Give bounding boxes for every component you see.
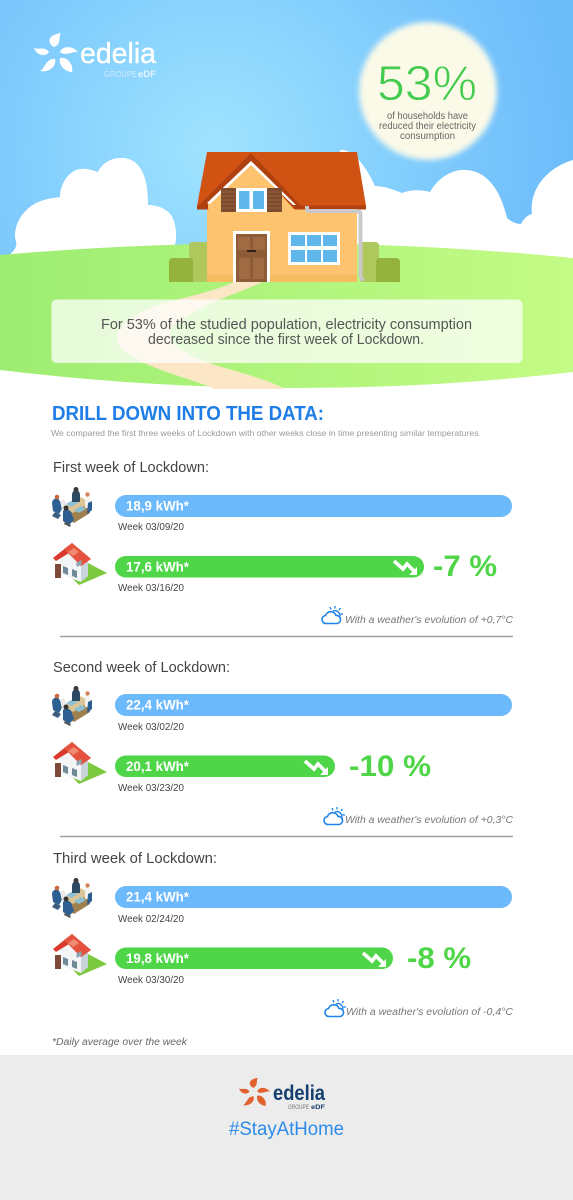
footnote: *Daily average over the week — [52, 1037, 188, 1048]
section: second week: Week 03/23/20 — [118, 783, 184, 794]
percent: -8 % — [407, 942, 471, 975]
weather note — [325, 999, 514, 1018]
weather note: With a weather's evolution of +0,7°C — [345, 615, 514, 626]
callout panel — [52, 300, 522, 363]
subheading: We compared the first three weeks of Lockdown with other weeks close in time presenting similar temperatures. — [51, 428, 481, 438]
wall — [207, 200, 357, 282]
bar: green lockdown week: 20,1 kWh* — [126, 758, 190, 774]
house — [169, 152, 400, 282]
footer — [0, 1055, 573, 1200]
callout panel: decreased since the first week of Lockdown. — [148, 331, 424, 348]
clouds — [8, 150, 573, 270]
logo: edelia colour: edelia — [273, 1082, 325, 1105]
bar: blue reference week: 22,4 kWh* — [126, 696, 190, 712]
sun with statistic — [359, 22, 497, 160]
section: first week: First week of Lockdown: — [53, 459, 209, 476]
callout panel: For 53% of the studied population, electricity consumption — [101, 316, 472, 333]
percent: -7 % — [433, 550, 497, 583]
section: first week: Week 03/09/20 — [118, 522, 184, 533]
icon: home — [53, 543, 107, 585]
percent: -10 % — [349, 750, 431, 783]
bar: blue reference week — [115, 886, 512, 908]
weather note: With a weather's evolution of +0,3°C — [345, 815, 514, 826]
logo: edelia white: edelia — [80, 38, 157, 70]
bar: blue reference week: 18,9 kWh* — [126, 498, 190, 514]
weather note: With a weather's evolution of -0,4°C — [346, 1007, 514, 1018]
window — [288, 232, 340, 265]
garden path — [117, 282, 285, 389]
bar: blue reference week: 21,4 kWh* — [126, 888, 190, 904]
sun with statistic: reduced their electricity — [379, 121, 476, 132]
weather note — [324, 807, 514, 826]
gable — [207, 162, 296, 212]
sun with statistic: 53% — [377, 57, 477, 111]
section: third week: Week 03/30/20 — [118, 975, 184, 986]
weather note — [322, 606, 514, 626]
green hill — [0, 243, 573, 388]
section: first week: Week 03/16/20 — [118, 583, 184, 594]
logo: edelia colour — [239, 1078, 325, 1111]
bar: blue reference week — [115, 495, 512, 517]
hashtag: #StayAtHome — [229, 1119, 344, 1140]
icon: office — [52, 878, 92, 918]
icon: office — [52, 686, 92, 726]
logo: edelia white: eDF — [138, 69, 157, 79]
heading: DRILL DOWN INTO THE DATA: — [52, 402, 324, 425]
sun with statistic: of households have — [387, 111, 468, 122]
section: second week — [52, 659, 514, 826]
door — [233, 231, 270, 282]
roof — [197, 152, 366, 206]
logo: edelia white — [34, 33, 157, 79]
gutter — [307, 206, 363, 281]
bar: blue reference week — [115, 694, 512, 716]
section: second week: Week 03/02/20 — [118, 722, 184, 733]
bar: green lockdown week: 19,8 kWh* — [126, 950, 190, 966]
bar: green lockdown week — [115, 756, 335, 777]
bar: green lockdown week — [115, 556, 424, 578]
logo: edelia colour: eDF — [311, 1104, 325, 1111]
bar: green lockdown week: 17,6 kWh* — [126, 558, 190, 574]
logo: edelia white: GROUPE — [104, 70, 137, 79]
section: third week — [52, 850, 514, 1018]
sun with statistic: consumption — [400, 131, 455, 142]
section: third week: Week 02/24/20 — [118, 914, 184, 925]
section: second week: Second week of Lockdown: — [53, 659, 230, 676]
logo: edelia colour: GROUPE — [288, 1105, 309, 1111]
background: sky — [0, 0, 573, 300]
dormer window and shutters — [221, 188, 282, 212]
section: first week — [52, 459, 514, 626]
bar: green lockdown week — [115, 948, 393, 969]
icon: home — [53, 742, 107, 784]
icon: office — [52, 487, 92, 527]
bushes — [169, 242, 400, 282]
icon: home — [53, 934, 107, 976]
section: third week: Third week of Lockdown: — [53, 850, 217, 867]
